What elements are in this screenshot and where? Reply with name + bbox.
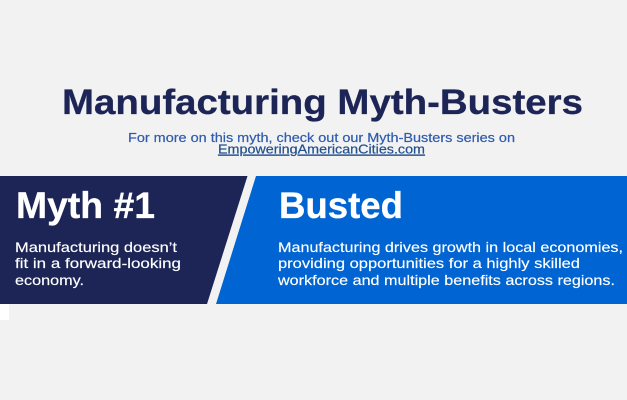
panel: myth [0, 176, 248, 304]
myth description [15, 239, 181, 288]
myth description: economy. [15, 272, 84, 288]
myth heading: Myth #1 [16, 185, 155, 226]
busted description: workforce and multiple benefits across regions. [277, 272, 615, 288]
subtitle with link [128, 131, 515, 156]
subtitle with link: EmpoweringAmericanCities.com [218, 142, 425, 156]
subtitle with link: For more on this myth, check out our Myth-Busters series on [128, 131, 515, 145]
myth description: fit in a forward-looking [15, 255, 181, 271]
myth description: Manufacturing doesn’t [15, 239, 177, 255]
busted description: Manufacturing drives growth in local economies, [278, 239, 623, 255]
title: Manufacturing Myth-Busters [62, 83, 583, 122]
panel: busted [216, 176, 627, 304]
busted description [277, 239, 623, 288]
busted description: providing opportunities for a highly skilled [278, 255, 580, 271]
busted heading: Busted [279, 185, 403, 226]
white corner block [0, 304, 9, 320]
